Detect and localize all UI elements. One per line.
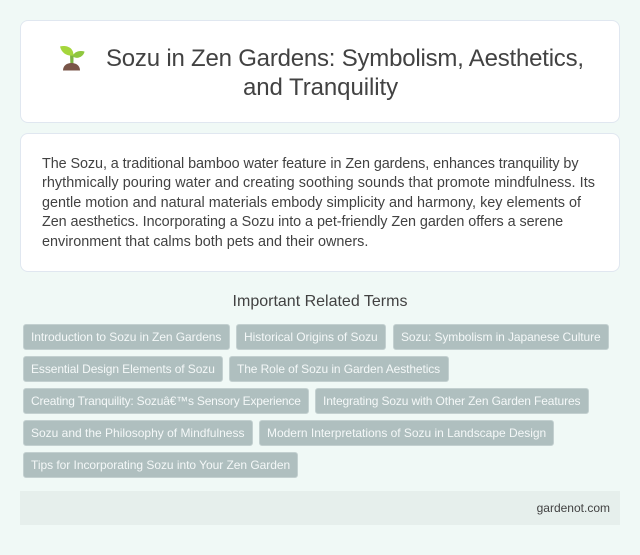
description text: rhythmically pouring water and creating soothing sounds that promote mindfulness. Its <box>42 175 595 191</box>
tag <box>23 452 298 478</box>
heading <box>106 45 584 101</box>
tag <box>315 388 589 414</box>
tag <box>23 388 309 414</box>
tag <box>259 420 554 446</box>
tag <box>393 324 609 350</box>
tag: Introduction to Sozu in Zen Gardens <box>31 330 221 344</box>
panel: description <box>20 133 620 272</box>
heading: Sozu in Zen Gardens: Symbolism, Aesthetics, <box>106 45 584 72</box>
tag <box>23 420 253 446</box>
tag <box>23 356 223 382</box>
footer: gardenot.com <box>537 501 610 515</box>
tag: Sozu and the Philosophy of Mindfulness <box>31 426 244 440</box>
panel: title card <box>20 20 620 123</box>
tag <box>229 356 449 382</box>
tag: Integrating Sozu with Other Zen Garden Features <box>323 394 580 408</box>
description text: gentle motion and natural materials embody simplicity and harmony, key elements of <box>42 194 581 210</box>
tag <box>23 324 230 350</box>
description text: The Sozu, a traditional bamboo water feature in Zen gardens, enhances tranquility by <box>42 156 578 172</box>
tag: Creating Tranquility: Sozuâ€™s Sensory Experience <box>31 394 301 408</box>
icon: seedling <box>60 46 84 70</box>
description text: environment that calms both pets and their owners. <box>42 234 368 250</box>
tag: Tips for Incorporating Sozu into Your Zen Garden <box>31 458 290 472</box>
related terms tags <box>23 324 609 478</box>
tag: Essential Design Elements of Sozu <box>31 362 215 376</box>
tag: Sozu: Symbolism in Japanese Culture <box>401 330 601 344</box>
heading: and Tranquility <box>243 74 398 101</box>
heading: related terms: Important Related Terms <box>233 293 407 310</box>
tag <box>236 324 386 350</box>
description text <box>42 156 595 250</box>
tag: Historical Origins of Sozu <box>244 330 378 344</box>
footer <box>20 491 620 525</box>
tag: The Role of Sozu in Garden Aesthetics <box>237 362 440 376</box>
tag: Modern Interpretations of Sozu in Landscape Design <box>267 426 546 440</box>
description text: Zen aesthetics. Incorporating a Sozu into a pet-friendly Zen garden offers a serene <box>42 214 563 230</box>
